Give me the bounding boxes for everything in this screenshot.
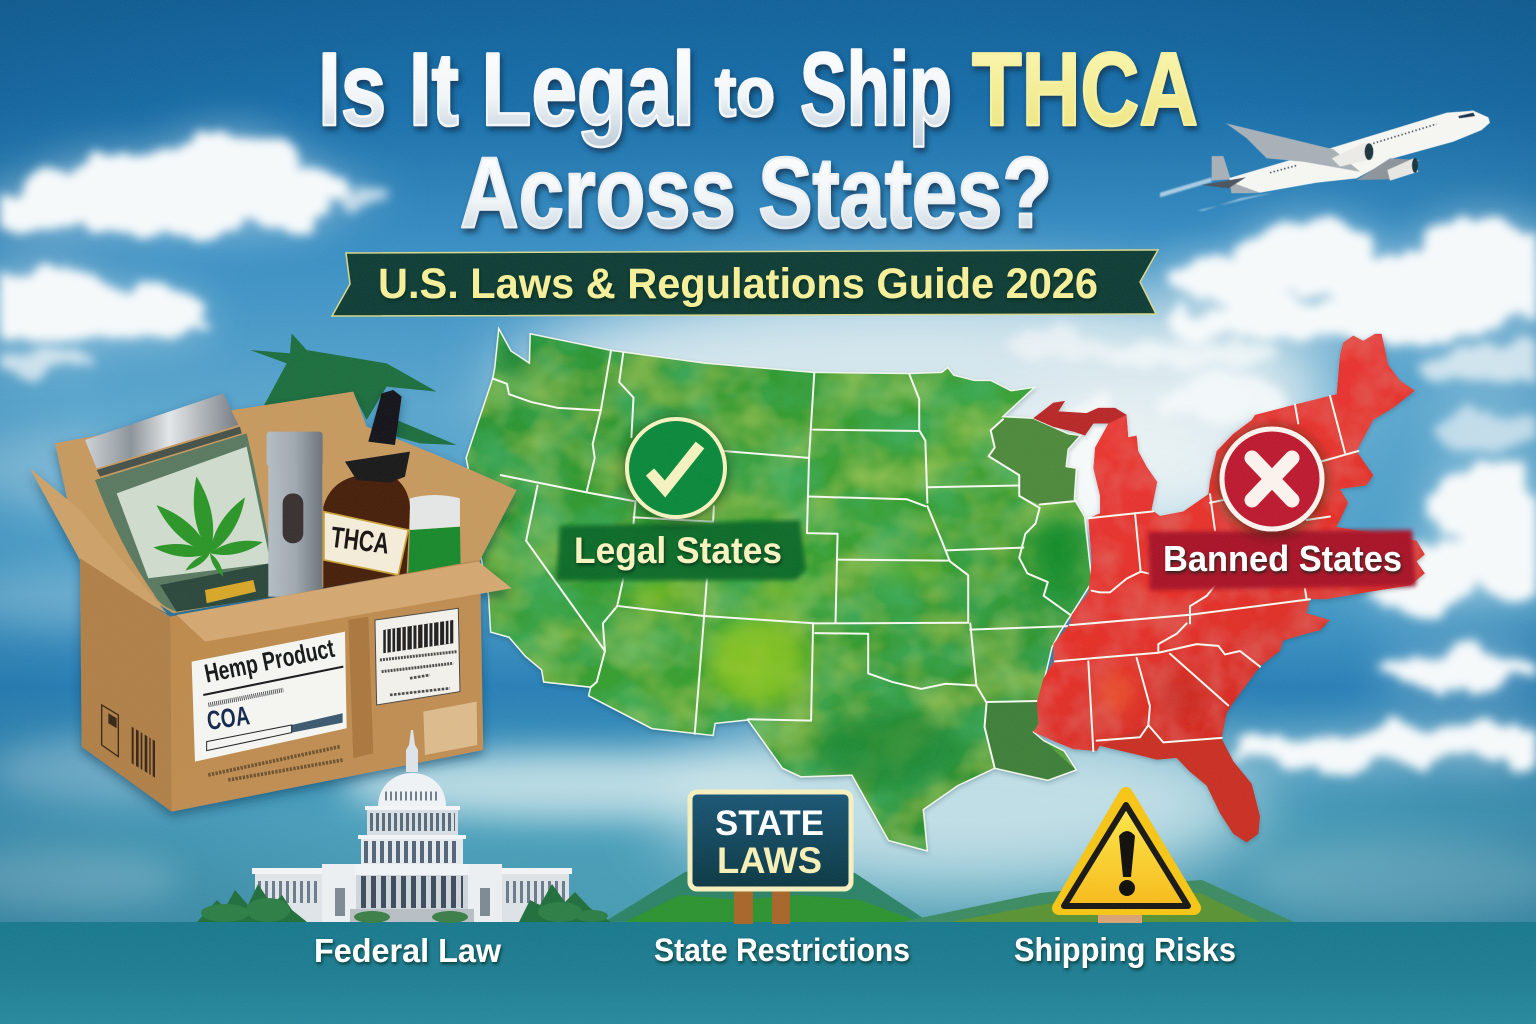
shipping box with products — [30, 390, 517, 812]
clouds — [0, 132, 1536, 768]
title: Ship — [800, 32, 952, 148]
product: silver vape tube — [267, 432, 323, 597]
Hemp Product label: Hemp Product — [202, 633, 337, 689]
banned states banner: Banned States — [1163, 538, 1402, 579]
legal (green) states — [466, 329, 1092, 851]
title: Is It Legal — [318, 32, 695, 148]
banned states banner — [1148, 530, 1416, 590]
capitol trees — [197, 884, 611, 923]
title — [318, 32, 1198, 249]
forest map fragment behind box — [250, 333, 457, 445]
product: amber THCA dropper bottle — [323, 390, 410, 588]
side markings — [102, 705, 155, 778]
icon: legal check mark — [627, 419, 725, 517]
barcode label — [375, 608, 460, 705]
Hemp Product label — [192, 632, 347, 762]
plane — [1160, 111, 1490, 211]
title: THCA — [972, 32, 1198, 148]
hills behind bottom icons — [604, 860, 1294, 922]
capitol wings — [252, 864, 572, 922]
icon: US Capitol, federal law — [197, 730, 611, 923]
banned (red) states — [1033, 334, 1425, 842]
state lines: central — [813, 430, 919, 431]
label: shipping risks: Shipping Risks — [1014, 931, 1236, 968]
USA map — [466, 329, 1425, 851]
product: small green bottle — [408, 495, 461, 573]
pale shipping sticker — [423, 702, 477, 755]
icon: banned cross — [1222, 429, 1322, 529]
legal states banner — [556, 520, 806, 581]
box back and inner flaps — [55, 392, 517, 613]
label: federal law: Federal Law — [314, 932, 501, 969]
product: jar — [85, 393, 275, 612]
Hemp Product label: COA — [205, 700, 251, 736]
printed fine print — [208, 747, 343, 780]
title: Across States? — [460, 137, 1052, 249]
capitol dome — [406, 730, 418, 772]
state lines: west — [493, 379, 601, 410]
product: amber THCA dropper bottle: THCA — [329, 521, 391, 561]
subtitle ribbon — [332, 250, 1158, 316]
icon: cannabis leaf — [151, 475, 264, 578]
icon: state laws sign: LAWS — [717, 840, 822, 881]
bottom label band — [0, 922, 1536, 1024]
icon: warning triangle — [1059, 794, 1194, 923]
cloud glow — [0, 132, 1536, 768]
icon: state laws sign: STATE — [715, 804, 824, 843]
title: to — [715, 53, 775, 131]
icon: state laws sign — [690, 792, 851, 924]
legal states banner: Legal States — [574, 530, 782, 571]
label: state restrictions: State Restrictions — [654, 932, 910, 968]
box front and side — [80, 558, 172, 812]
subtitle ribbon: U.S. Laws & Regulations Guide 2026 — [378, 260, 1098, 308]
